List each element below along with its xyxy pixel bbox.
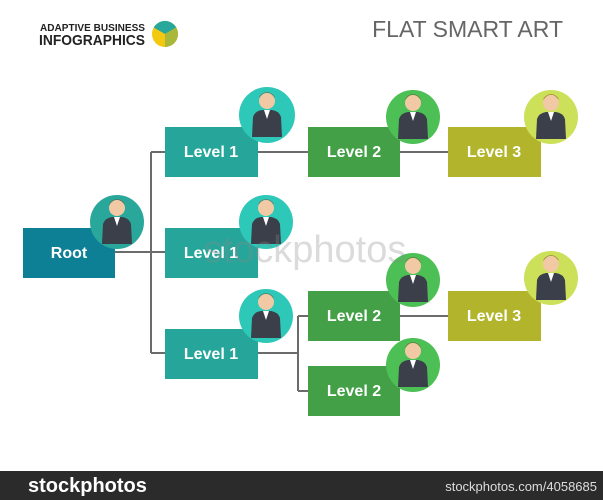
logo: INFOGRAPHICS: [39, 32, 145, 49]
connectors: [115, 152, 448, 391]
box: level2 mid: [308, 291, 400, 341]
watermark: stockphotos: [204, 229, 406, 271]
box: level3 top: Level 3: [467, 144, 521, 161]
box: level1 top: [165, 127, 258, 177]
box: level2 mid: Level 2: [327, 308, 381, 325]
icon: logo pie: [152, 21, 178, 47]
footer bar: stockphotos: [28, 475, 147, 497]
box: level1 top: Level 1: [184, 144, 238, 161]
icon: avatar l3 mid: [524, 251, 578, 305]
box: level2 top: Level 2: [327, 144, 381, 161]
logo: [39, 21, 178, 49]
box: level1 bottom: Level 1: [184, 346, 238, 363]
icon: avatar l1 mid: [239, 195, 293, 249]
box: root: Root: [51, 245, 88, 262]
box: level3 mid: [448, 291, 541, 341]
footer bar: [0, 471, 603, 500]
icon: avatar l2 mid: [386, 253, 440, 307]
box: level2 bottom: [308, 366, 400, 416]
icon: avatar l3 top: [524, 90, 578, 144]
box: root: [23, 228, 115, 278]
box: level2 top: [308, 127, 400, 177]
icon: avatar l1 bottom: [239, 289, 293, 343]
icon: avatar root: [90, 195, 144, 249]
footer bar: stockphotos.com/4058685: [445, 479, 597, 494]
box: level1 bottom: [165, 329, 258, 379]
title: FLAT SMART ART: [372, 16, 563, 42]
box: level2 bottom: Level 2: [327, 383, 381, 400]
icon: avatar l2 top: [386, 90, 440, 144]
icon: avatar l1 top: [239, 87, 295, 143]
logo: ADAPTIVE BUSINESS: [40, 22, 145, 34]
box: level1 mid: [165, 228, 258, 278]
box: level3 mid: Level 3: [467, 308, 521, 325]
box: level3 top: [448, 127, 541, 177]
icon: avatar l2 bottom: [386, 338, 440, 392]
box: level1 mid: Level 1: [184, 245, 238, 262]
